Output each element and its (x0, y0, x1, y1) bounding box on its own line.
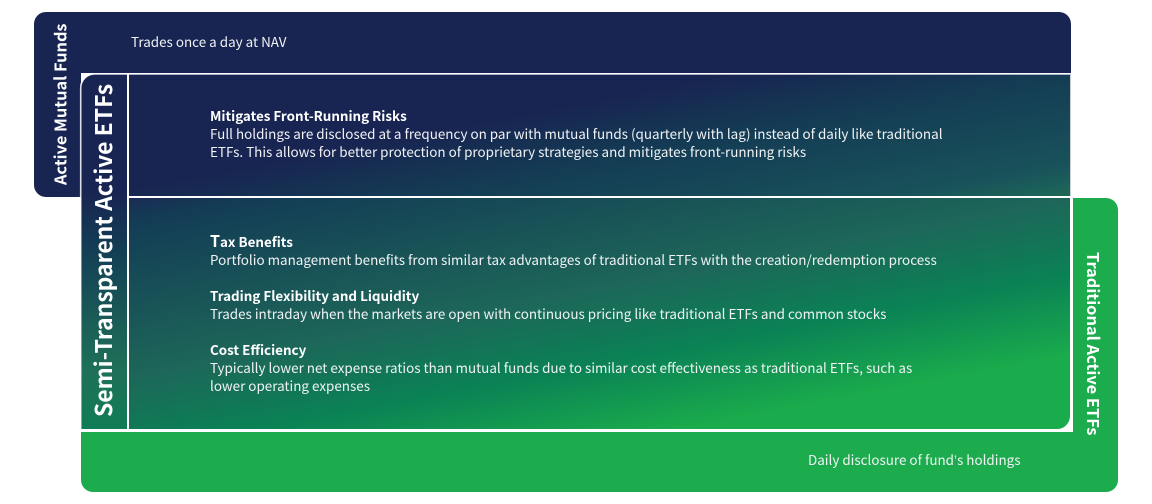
text block: mitigates front-running risks: ETFs. This allows for better protection of proprietary strategies and mitigates front-running risks (210, 141, 806, 161)
text: trades once a day: Trades once a day at NAV (131, 31, 287, 51)
text block: mitigates front-running risks: Full holdings are disclosed at a frequency on par with mutual funds (quarterly with lag) instead of daily like traditional (210, 123, 943, 143)
frame: outline (81, 74, 1071, 431)
heading: semi-transparent active ETFs: Semi-Transparent Active ETFs (85, 84, 119, 417)
panel: semi-transparent active ETFs (81, 74, 1071, 431)
heading: traditional active ETFs: Traditional Active ETFs (1082, 252, 1106, 435)
text: daily disclosure: Daily disclosure of fund’s holdings (808, 449, 1021, 469)
text block: mitigates front-running risks: Mitigates Front-Running Risks (210, 105, 407, 125)
text block: trading flexibility and liquidity: Trades intraday when the markets are open with continuous pricing like traditional ETFs and common stocks (210, 303, 886, 323)
text block: cost efficiency: lower operating expenses (210, 375, 370, 395)
text block: trading flexibility and liquidity (210, 285, 886, 323)
text block: cost efficiency: Cost Efficiency (210, 339, 307, 359)
section: upper panel background (128, 74, 1071, 197)
text block: tax benefits: Portfolio management benefits from similar tax advantages of traditional ETFs with the creation/redemption process (210, 249, 937, 269)
text block: trading flexibility and liquidity: Trading Flexibility and Liquidity (210, 285, 419, 305)
text block: mitigates front-running risks (210, 105, 943, 161)
heading: active mutual funds: Active Mutual Funds (48, 24, 72, 186)
column: heading column (81, 74, 128, 430)
section: lower panel background (128, 197, 1071, 430)
text block: cost efficiency: Typically lower net expense ratios than mutual funds due to similar cost effectiveness as traditional ETFs, such as (210, 357, 912, 377)
text block: tax benefits (210, 228, 937, 269)
text block: tax benefits: Tax Benefits (210, 228, 293, 252)
text block: cost efficiency (210, 339, 912, 395)
